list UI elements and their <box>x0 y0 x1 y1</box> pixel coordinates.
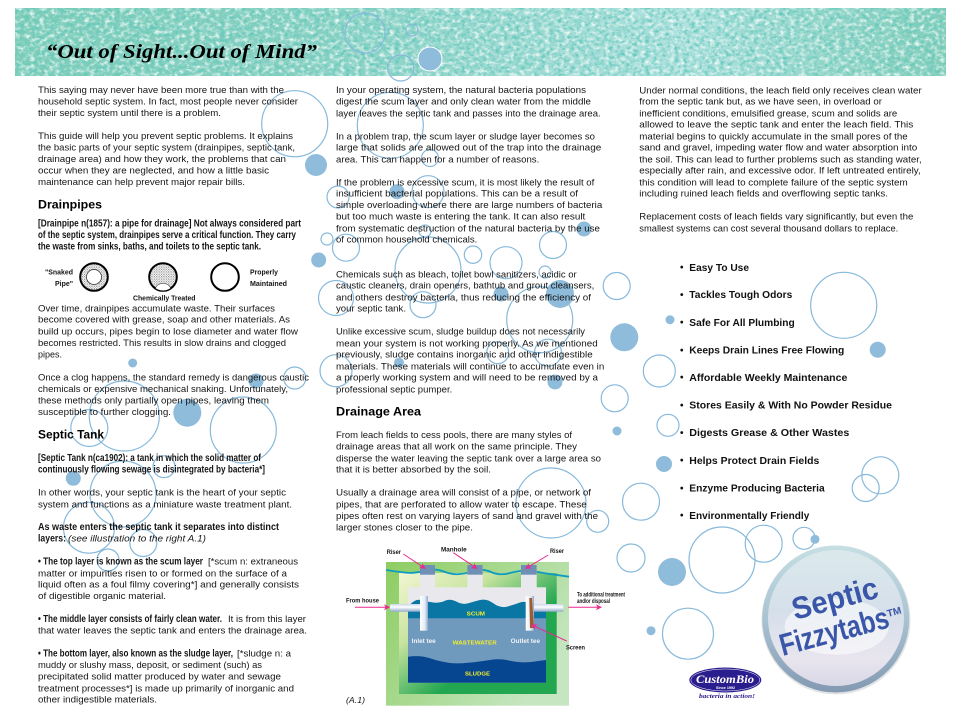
text block: introduction: the basic parts of your septic system (drainpipes, septic tank, <box>38 143 295 154</box>
text block: septic tank: [Septic Tank n(ca1902): a tank in which the solid matter of <box>38 453 262 464</box>
CustomBio logo <box>689 668 761 700</box>
benefits bullet list: Digests Grease & Other Wastes <box>689 428 850 439</box>
benefits bullet list: • <box>680 483 684 494</box>
text block: chemicals and sludge: Chemicals such as bleach, toilet bowl sanitizers, acidic or <box>336 269 577 280</box>
text block: drainpipe buildup: susceptible to further clogging. <box>38 407 171 418</box>
text block: operating system and problem trap: If the problem is excessive scum, it is most likely the result of <box>336 177 595 188</box>
benefits bullet list: • <box>680 373 684 384</box>
CustomBio logo: Since 1992 <box>716 686 735 690</box>
text block: drainage area: pipes often rest on varying layers of sand and gravel with the <box>336 511 598 522</box>
text block: operating system and problem trap: digest the scum layer and only clean water from the middle <box>336 97 591 108</box>
text block: septic tank <box>38 453 292 545</box>
text block: septic tank: continuously flowing sewage is disintegrated by bacteria*] <box>38 465 265 476</box>
text block: leach field: material begins to quickly accumulate in the small pores of the <box>639 131 908 142</box>
text block: drainage area: larger stones closer to the pipe. <box>336 522 473 533</box>
tank body <box>408 565 546 683</box>
text block: layers: that water leaves the septic tank and enters the drainage area. <box>38 626 307 637</box>
text block: operating system and problem trap: layer leaves the septic tank and passes into the drainage area. <box>336 108 601 119</box>
septic tank diagram <box>346 546 625 706</box>
heading: Drainpipes: Drainpipes <box>38 198 102 211</box>
soil frame <box>399 573 557 694</box>
text block: introduction: This saying may never have been more true than with the <box>38 85 284 96</box>
text block: operating system and problem trap: but too much waste is entering the tank. It can also result <box>336 212 586 223</box>
text block: leach field: smallest systems can cost several thousand dollars to replace. <box>639 223 898 234</box>
text block: drainpipe buildup: Over time, drainpipes accumulate waste. Their surfaces <box>38 304 275 315</box>
text block: septic tank: As waste enters the septic tank it separates into distinct <box>38 522 280 533</box>
text block: operating system and problem trap: large that solids are allowed out of the trap into the drainage <box>336 143 601 154</box>
text block: chemicals and sludge: and others destroy bacteria, thus reducing the efficiency of <box>336 292 591 303</box>
text block: chemicals and sludge: materials. These materials will continue to accumulate even in <box>336 361 604 372</box>
text block: introduction: drainage area) and how they work, the problems that can <box>38 154 286 165</box>
pipe diagrams <box>45 263 287 302</box>
text block: layers: [*sludge n: a <box>237 649 292 660</box>
scum layer <box>408 600 546 618</box>
text block: drainage area: Usually a drainage area will consist of a pipe, or network of <box>336 488 591 499</box>
text block: layers: It is from this layer <box>228 614 307 625</box>
decorative bubbles <box>64 13 899 659</box>
pipe: snaked <box>45 263 108 291</box>
text block: layers: precipitated solid matter produced by water and sewage <box>38 672 281 683</box>
text block: leach field: from the septic tank but, as we have seen, in overload or <box>639 97 883 108</box>
text block: layers: [*scum n: extraneous <box>208 557 298 568</box>
outlet tee <box>526 596 563 631</box>
text block: operating system and problem trap: simple overloading where there are large numbers of bacteria <box>336 200 603 211</box>
callout labels: Riser <box>387 549 402 556</box>
layer labels: SCUM <box>467 611 485 617</box>
text block: layers <box>38 557 307 706</box>
pipe: properly maintained: Properly <box>250 268 279 276</box>
magenta arrows <box>355 553 601 641</box>
CustomBio logo: CustomBio <box>696 674 754 686</box>
callout labels: From house <box>346 598 380 604</box>
pipe: properly maintained <box>211 263 287 291</box>
layer labels: WASTEWATER <box>453 640 498 646</box>
text block: operating system and problem trap: area. This can happen for a number of reasons. <box>336 154 539 165</box>
text block: leach field: sand and gravel, impeding water flow and water absorption into <box>639 143 917 154</box>
text block: leach field: this condition will lead to complete failure of the septic system <box>639 177 908 188</box>
header banner <box>15 8 946 76</box>
text block: introduction: their septic system until there is a problem. <box>38 108 221 119</box>
figure caption: (A.1) <box>346 695 365 705</box>
text block: introduction: maintenance can help prevent major repair bills. <box>38 177 245 188</box>
text block: operating system and problem trap: of common household chemicals. <box>336 235 477 246</box>
text block: introduction: household septic system. In fact, most people never consider <box>38 97 299 108</box>
text block: chemicals and sludge <box>336 269 604 395</box>
text block: introduction: This guide will help you prevent septic problems. It explains <box>38 131 293 142</box>
text block: operating system and problem trap: In a problem trap, the scum layer or sludge layer becomes so <box>336 131 595 142</box>
text block: layers: • The middle layer consists of fairly clean water. <box>38 614 222 625</box>
benefits bullet list <box>680 263 892 522</box>
text block: operating system and problem trap <box>336 85 603 246</box>
benefits bullet list: • <box>680 345 684 356</box>
text block: chemicals and sludge: your septic tank. <box>336 304 406 315</box>
callout labels: Riser <box>550 548 565 555</box>
text block: drainpipe buildup: build up occurs, pipes begin to lose diameter and water flow <box>38 327 298 338</box>
text block: layers: • The top layer is known as the scum layer <box>38 557 203 568</box>
text block: leach field <box>639 85 923 234</box>
text block: drainage area: pipes, that are perforated to allow water to escape. These <box>336 499 587 510</box>
title: “Out of Sight...Out of Mind” <box>46 41 317 63</box>
benefits bullet list: Enzyme Producing Bacteria <box>689 484 825 494</box>
text block: drainage area: disperse the water leaving the septic tank over a large area so <box>336 453 601 464</box>
CustomBio logo: bacteria in action! <box>699 693 755 700</box>
pipe: chemically treated: Chemically Treated <box>133 294 196 302</box>
text block: chemicals and sludge: Unlike excessive scum, sludge buildup does not necessarily <box>336 327 585 338</box>
layer labels: Outlet tee <box>511 638 541 645</box>
inlet tee <box>390 596 428 631</box>
text block: layers: other indigestible materials. <box>38 695 157 706</box>
text block: drainpipe buildup: Once a clog happens, the standard remedy is dangerous caustic <box>38 373 309 384</box>
text block: drainpipe buildup <box>38 304 309 418</box>
text block: drainage area: that it is better absorbed by the soil. <box>336 465 491 476</box>
text block: leach field: Replacement costs of leach fields vary significantly, but even the <box>639 212 913 223</box>
text block: leach field: Under normal conditions, the leach field only receives clean water <box>639 85 923 96</box>
text block: drainpipe definition: of the septic system, drainpipes serve a critical function. They carry <box>38 230 296 241</box>
text block: drainpipe buildup: pipes. <box>38 350 62 361</box>
layer labels: SLUDGE <box>465 671 490 677</box>
text block: operating system and problem trap: from systematic destruction of the natural bacteria by the use <box>336 223 600 234</box>
text block: drainpipe buildup: chemicals or expensive mechanical snaking. Unfortunately, <box>38 384 288 395</box>
text block: drainpipe buildup: becomes restricted. This results in slow drains and clogged <box>38 338 286 349</box>
pipe: chemically treated <box>133 263 196 302</box>
ground background <box>386 562 569 706</box>
text block: layers: of digestible organic material. <box>38 591 166 602</box>
benefits bullet list: Easy To Use <box>689 263 749 274</box>
benefits bullet list: • <box>680 290 684 301</box>
benefits bullet list: Environmentally Friendly <box>689 511 810 522</box>
text block: leach field: allowed to leave the septic tank and enter the leach field. This <box>639 120 914 131</box>
callout labels: Screen <box>566 644 585 652</box>
text block: layers: liquid often as a foul filmy covering*] and generally consists <box>38 580 299 591</box>
callout labels: To additional treatment <box>577 592 625 598</box>
text block: chemicals and sludge: mean your system is not working properly. As we mentioned <box>336 338 598 349</box>
heading: Septic Tank: Septic Tank <box>38 428 105 441</box>
benefits bullet list: • <box>680 456 684 467</box>
text block: layers: treatment processes*] is made up primarily of inorganic and <box>38 683 294 694</box>
text block: layers: matter or impurities risen to or formed on the surface of a <box>38 568 288 579</box>
text block: drainpipe buildup: become covered with grease, soap and other materials. As <box>38 315 290 326</box>
wastewater layer <box>408 618 546 683</box>
product badge: Septic Fizzytabs <box>762 546 910 694</box>
text block: layers: muddy or slushy mass, deposit, or sediment (such) as <box>38 660 262 671</box>
text block: septic tank: layers: <box>38 534 66 545</box>
text block: drainage area: drainage areas that all work on the same principle. They <box>336 442 577 453</box>
text block: septic tank: system and functions as a miniature waste treatment plant. <box>38 499 292 510</box>
benefits bullet list: • <box>680 400 684 411</box>
benefits bullet list: Tackles Tough Odors <box>689 290 793 301</box>
text block: drainage area <box>336 430 601 533</box>
layer labels <box>412 611 541 677</box>
text block: layers: • The bottom layer, also known as the sludge layer, <box>38 649 233 660</box>
product badge: Septic Fizzytabs: Fizzytabs <box>775 600 893 663</box>
layer labels: Inlet tee <box>412 638 436 645</box>
text block: septic tank: In other words, your septic tank is the heart of your septic <box>38 488 286 499</box>
benefits bullet list: Helps Protect Drain Fields <box>689 456 820 467</box>
benefits bullet list: Stores Easily & With No Powder Residue <box>689 400 892 412</box>
callout labels: Manhole <box>441 546 467 554</box>
pipe: snaked: Pipe" <box>55 279 73 288</box>
sludge layer <box>408 656 546 683</box>
benefits bullet list: Keeps Drain Lines Free Flowing <box>689 346 844 356</box>
text block: drainpipe definition: the waste from sinks, baths, and toilets to the septic tank. <box>38 242 261 253</box>
text block: chemicals and sludge: caustic cleaners, drain openers, bathtub and grout cleansers, <box>336 281 594 292</box>
benefits bullet list: Safe For All Plumbing <box>689 318 795 329</box>
text block: drainpipe buildup: these methods only partially open pipes, leaving them <box>38 396 269 407</box>
text block: leach field: the soil. This can lead to further problems such as standing water, <box>639 154 922 165</box>
text block: leach field: inefficient conditions, emulsified grease, scum and solids are <box>639 108 897 119</box>
product badge: Septic Fizzytabs: Septic <box>788 570 882 627</box>
callout labels <box>346 546 625 652</box>
text block: chemicals and sludge: professional septic pumper. <box>336 384 452 395</box>
text block: leach field: including ruined leach fields and overflowing septic tanks. <box>639 189 888 200</box>
product badge: Septic Fizzytabs: TM <box>886 606 903 620</box>
heading: Drainage Area: Drainage Area <box>336 406 422 419</box>
callout labels: and/or disposal <box>577 598 610 605</box>
text block: introduction <box>38 85 299 188</box>
text block: septic tank: (see illustration to the right A.1) <box>68 534 206 545</box>
text block: chemicals and sludge: a properly working system and will need to be removed by a <box>336 373 599 384</box>
pipe: properly maintained: Maintained <box>250 279 287 288</box>
benefits bullet list: • <box>680 263 684 274</box>
pipe: snaked: "Snaked <box>45 268 73 276</box>
ground water line <box>386 570 569 577</box>
text block: drainpipe definition: [Drainpipe n(1857): a pipe for drainage] Not always considered part <box>38 219 302 230</box>
text block: operating system and problem trap: In your operating system, the natural bacteria populations <box>336 85 586 96</box>
benefits bullet list: • <box>680 511 684 522</box>
text block: leach field: especially after rain, and excessive odor. If left untreated entirely, <box>639 166 921 177</box>
text block: chemicals and sludge: previously, sludge contains inorganic and other indigestible <box>336 350 593 361</box>
benefits bullet list: Affordable Weekly Maintenance <box>689 373 848 384</box>
text block: drainpipe definition <box>38 219 302 253</box>
text block: operating system and problem trap: insufficient bacterial populations. This can be a result of <box>336 189 578 200</box>
text block: drainage area: From leach fields to cess pools, there are many styles of <box>336 430 572 441</box>
text block: introduction: occur when they are neglected, and how a little basic <box>38 166 269 177</box>
benefits bullet list: • <box>680 428 684 439</box>
benefits bullet list: • <box>680 318 684 329</box>
